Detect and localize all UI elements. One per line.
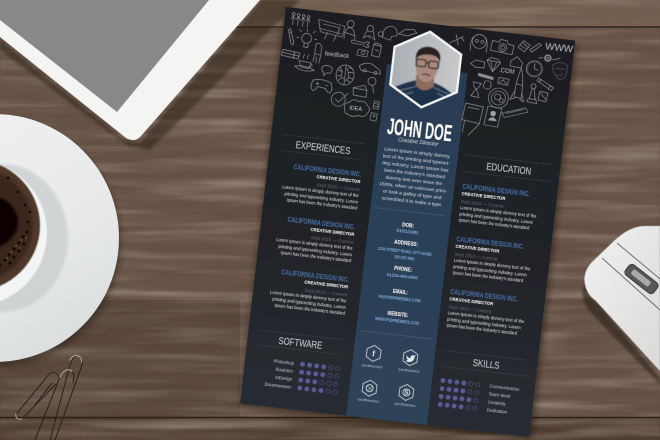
doodle: medal xyxy=(363,25,377,40)
address xyxy=(377,238,434,263)
address: 1234 STREET ROAD, CITY NAME, xyxy=(378,246,433,257)
education entry 1: CALIFORNIA DESIGN INC. xyxy=(462,182,531,198)
education entry 1: printing and typesetting industry. Lorem xyxy=(459,211,534,225)
software rating dots xyxy=(297,362,340,395)
doodle: WWW: WWW xyxy=(545,41,574,55)
doodle: gear xyxy=(539,54,560,62)
date of birth: 01/01/1982 xyxy=(396,228,419,235)
doodle: camera xyxy=(490,38,515,55)
education entry 1: Ipsum has been the industry's standard xyxy=(458,217,530,231)
panel: experiences xyxy=(262,134,365,316)
education entry 1: CREATIVE DIRECTOR xyxy=(461,191,506,202)
portrait xyxy=(394,46,452,106)
doodle: coffee cup xyxy=(294,53,316,72)
education entry 2: Lorem Ipsum is simply dummy text of the xyxy=(454,258,531,272)
experience entry 3: Sept 2010 — Current xyxy=(304,288,348,298)
date of birth xyxy=(396,222,420,235)
experience entry 2: printing and typesetting industry. Lorem xyxy=(278,244,353,257)
website: WWW.PSDFREEBIES.COM xyxy=(375,316,420,326)
doodle: shape xyxy=(483,80,492,89)
icon: twitter: /psdfreebies xyxy=(398,366,420,374)
education entry 1: Sept 2010 — Current xyxy=(460,199,504,209)
doodle: billboard xyxy=(316,19,346,42)
phone xyxy=(387,265,419,281)
icon: facebook: f xyxy=(372,349,376,359)
experience entry 1: Ipsum has been the industry's standard xyxy=(286,197,358,211)
doodle: person xyxy=(344,20,357,40)
resume paper shadow xyxy=(240,10,577,440)
coffee saucer xyxy=(0,114,121,367)
doodle: gamepad xyxy=(310,78,333,93)
doodle: top car xyxy=(399,28,417,37)
education entry 3: printing and typesetting industry. Lorem xyxy=(447,316,521,330)
paper clips xyxy=(16,356,82,440)
doodle: pencil xyxy=(529,42,542,53)
experience entry 2: CREATIVE DIRECTOR xyxy=(310,227,355,238)
doodle: pen tool xyxy=(313,43,322,63)
doodle: certificate pill xyxy=(501,105,529,120)
doodle: diamond xyxy=(486,57,501,73)
education entry 1: Lorem Ipsum is simply dummy text of the xyxy=(460,205,537,219)
icon: facebook xyxy=(361,344,385,370)
doodle: plane xyxy=(449,34,464,46)
icon: skype xyxy=(394,383,418,408)
doodle: photo xyxy=(498,77,509,85)
about paragraph: er took a galley of type and xyxy=(383,188,442,201)
computer mouse xyxy=(582,226,660,384)
hexagon frame xyxy=(388,28,463,111)
education entry 1 xyxy=(458,182,540,231)
doodle: feedback word: feedback xyxy=(324,51,350,60)
skill names: Creativity xyxy=(488,399,507,407)
about paragraph: text of the printing and typeset- xyxy=(383,153,450,167)
doodle: wallet xyxy=(352,84,367,97)
doodle: card xyxy=(281,49,300,59)
doodle: IDEA cloud xyxy=(343,99,370,118)
doodle: pencil xyxy=(287,28,295,45)
about paragraph: 1500s, when an unknown print- xyxy=(379,181,447,195)
education entry 2: Ipsum has been the industry's standard xyxy=(452,270,524,283)
about paragraph: been the industry's standard xyxy=(384,167,446,180)
address: OR 00T 0RD xyxy=(394,254,415,261)
doodle: rocket xyxy=(510,67,527,102)
email xyxy=(378,287,422,303)
doodle: check badge xyxy=(331,91,348,107)
heading: education: EDUCATION xyxy=(486,162,532,178)
experience entry 3: CREATIVE DIRECTOR xyxy=(304,279,349,291)
about paragraph: dummy text ever since the xyxy=(385,175,443,187)
social icons xyxy=(357,344,422,408)
doodle: light bulb xyxy=(296,28,318,48)
software names: Photoshop xyxy=(273,358,295,366)
doodle: marker xyxy=(478,73,494,80)
experience entry 1 xyxy=(281,161,362,211)
doodle: small frame xyxy=(538,91,548,102)
experience entry 1: Sept 2010 — Current xyxy=(316,182,360,192)
email: HI@PSDFREEBIES.COM xyxy=(378,294,421,303)
doodle: woman face xyxy=(470,34,488,52)
heading: software: SOFTWARE xyxy=(278,336,323,352)
software names xyxy=(264,358,295,390)
doodle: small list xyxy=(373,101,379,109)
experience entry 1: CREATIVE DIRECTOR xyxy=(316,174,361,185)
skills rating dots xyxy=(438,378,480,411)
doodle: jar xyxy=(371,42,382,57)
experience entry 2: Lorem Ipsum is simply dummy text of the xyxy=(276,237,353,251)
email: EMAIL: xyxy=(393,289,408,296)
education entry 3 xyxy=(446,287,528,337)
tablet xyxy=(0,0,300,150)
heading: experiences: EXPERIENCES xyxy=(295,140,351,157)
icon: skype: /psdfreebies xyxy=(394,401,416,408)
doodle: helmet xyxy=(378,25,398,41)
job title: Creative Director xyxy=(398,137,439,148)
doodle: portrait card xyxy=(484,106,502,127)
doodle: speech bubble xyxy=(321,65,333,76)
doodle: chess piece xyxy=(527,83,539,104)
doodle: hourglass xyxy=(470,82,482,98)
doodle: banner xyxy=(536,78,554,91)
website: WEBSITE: xyxy=(387,311,409,319)
experience entry 2: Sept 2010 — Current xyxy=(310,235,354,245)
doodle: tag xyxy=(517,40,531,52)
education entry 3: CALIFORNIA DESIGN INC. xyxy=(450,287,518,304)
address: ADDRESS: xyxy=(394,240,418,248)
doodle: small frame xyxy=(370,112,377,121)
education entry 3: Sept 2010 — Current xyxy=(448,304,492,314)
software names: InDesign xyxy=(275,375,293,382)
doodle: shuttle xyxy=(470,59,485,68)
icon: facebook: /psdfreebies xyxy=(361,362,383,370)
doodle: clock xyxy=(525,60,543,78)
coffee cup xyxy=(0,160,68,312)
education entry 3: CREATIVE DIRECTOR xyxy=(449,296,494,307)
experience entry 1: CALIFORNIA DESIGN INC. xyxy=(293,162,362,179)
phone: PHONE: xyxy=(394,266,412,274)
doodle: dot com word: .COM xyxy=(499,68,515,76)
experience entry 2: Ipsum has been the industry's standard xyxy=(280,250,352,263)
doodle: magnifier xyxy=(367,77,376,93)
experience entry 1: printing and typesetting industry. Lorem xyxy=(284,191,359,204)
photo backdrop xyxy=(388,28,463,111)
education entry 2: printing and typesetting industry. Lorem xyxy=(453,264,527,278)
doodle: car xyxy=(358,62,381,75)
doodle: people xyxy=(290,12,311,28)
doodles: right group xyxy=(439,30,574,146)
education entry 3: Lorem Ipsum is simply dummy text of the xyxy=(448,310,525,324)
software names: Illustrator xyxy=(275,367,294,374)
doodle: wrench xyxy=(351,40,370,48)
doodle: IDEA cloud: IDEA xyxy=(349,105,363,113)
panel: education xyxy=(445,155,552,338)
experience entry 3: Lorem Ipsum is simply dummy text of the xyxy=(270,290,347,303)
experience entry 1: Lorem Ipsum is simply dummy text of the xyxy=(282,184,360,198)
doodles: left group xyxy=(275,12,418,125)
education entry 3: Ipsum has been the industry's standard xyxy=(446,323,518,336)
doodle: face xyxy=(551,62,568,81)
about paragraph: ting industry. Lorem Ipsum has xyxy=(382,160,449,174)
experience entry 2 xyxy=(274,214,356,263)
education entry 2 xyxy=(452,234,534,284)
doodle: tablet pointing xyxy=(460,103,484,137)
doodle: photo frame xyxy=(357,49,368,57)
skill names: Team Work xyxy=(488,391,511,399)
heading: skills: SKILLS xyxy=(472,358,500,372)
resume sheet xyxy=(240,7,575,437)
about paragraph: scrambled it to make a type xyxy=(381,195,442,208)
center blue band xyxy=(346,64,468,425)
phone: 01234-456-0000 xyxy=(387,272,419,281)
skill names xyxy=(487,384,520,416)
about paragraph: Lorem Ipsum is simply dummy xyxy=(384,146,451,160)
panel: skills xyxy=(437,350,530,417)
about paragraph xyxy=(377,146,451,209)
icon: dribbble: /psdfreebies xyxy=(357,396,379,404)
skill names: Communication xyxy=(489,384,520,392)
doodle: house xyxy=(510,56,523,68)
website xyxy=(375,309,420,326)
panel: software xyxy=(253,330,343,395)
profile photo hexagon xyxy=(388,28,465,111)
icon: skype: S xyxy=(404,390,409,397)
experience entry 3: Ipsum has been the industry's standard xyxy=(274,303,346,316)
contact details xyxy=(369,220,436,327)
skill names: Dedication xyxy=(487,407,508,415)
doodle: brain xyxy=(335,64,355,86)
experience entry 3 xyxy=(268,266,350,316)
experience entry 3: CALIFORNIA DESIGN INC. xyxy=(281,267,350,284)
doodle: target xyxy=(487,87,510,109)
experience entry 3: printing and typesetting industry. Lorem xyxy=(272,296,346,310)
education entry 2: CALIFORNIA DESIGN INC. xyxy=(456,234,524,251)
education entry 2: Sept 2010 — Current xyxy=(454,252,498,262)
experience entry 2: CALIFORNIA DESIGN INC. xyxy=(287,215,356,232)
education entry 2: CREATIVE DIRECTOR xyxy=(455,244,500,255)
name: JOHN DOE xyxy=(386,113,454,146)
software names: Dreamweaver xyxy=(264,382,292,390)
date of birth: DOB: xyxy=(402,222,414,230)
